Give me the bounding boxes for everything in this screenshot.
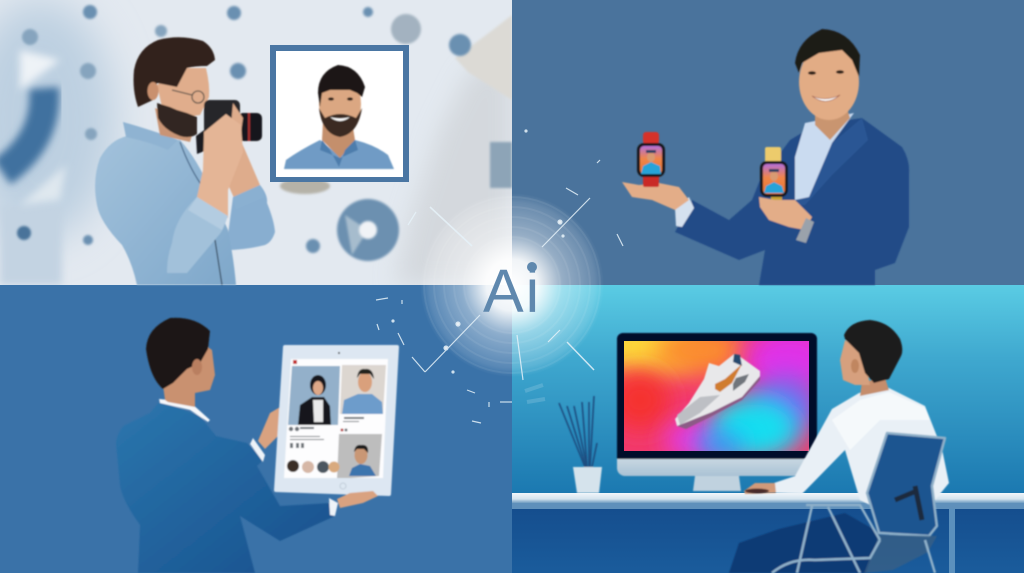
shirt body	[95, 122, 236, 285]
beard	[157, 103, 197, 137]
near hand	[197, 114, 243, 218]
panel: photographer with portrait	[0, 0, 512, 285]
watch: yellow	[760, 147, 788, 205]
plant	[559, 396, 602, 493]
collar	[159, 399, 210, 422]
portrait man	[284, 65, 394, 169]
shoe	[675, 354, 760, 429]
suit	[116, 401, 335, 573]
hair	[134, 37, 215, 107]
figure: photographer	[95, 37, 275, 285]
panel: right bottom background	[512, 285, 1024, 495]
figure: desk scene	[512, 313, 1024, 573]
cuffs	[250, 438, 265, 462]
desk	[512, 493, 1024, 573]
centre glow rings	[420, 193, 604, 377]
glasses	[172, 90, 204, 103]
panel: right top background	[512, 0, 1024, 285]
neck	[155, 108, 195, 142]
suit	[675, 118, 909, 285]
hair	[795, 29, 860, 77]
face	[157, 68, 209, 120]
seated person	[729, 320, 949, 573]
neck and ear	[163, 345, 215, 407]
monitor	[617, 333, 817, 491]
neck	[815, 108, 850, 140]
smile	[812, 95, 840, 101]
story thumbnails	[287, 460, 340, 473]
face	[840, 340, 870, 385]
lower hand	[337, 491, 378, 508]
tablet	[276, 347, 397, 494]
neck	[860, 378, 889, 396]
AI logo text: Ai	[483, 257, 541, 325]
holding hand	[759, 197, 812, 230]
raised hand	[258, 403, 290, 449]
tech lines and particles	[376, 130, 623, 423]
palm hand	[622, 182, 689, 210]
photo: man top	[340, 365, 386, 414]
feed text lines	[289, 417, 364, 448]
ear	[148, 82, 158, 100]
portrait frame	[270, 45, 409, 182]
figure: businessman with watches	[622, 29, 909, 285]
watch: red	[637, 132, 665, 187]
face	[799, 44, 859, 120]
photo: man bottom	[337, 434, 382, 479]
shirt	[774, 388, 949, 520]
trousers	[729, 513, 880, 573]
hair	[146, 318, 210, 389]
left cuff	[675, 197, 694, 227]
shirt	[795, 113, 854, 200]
wristwatch	[796, 218, 814, 243]
figure: person with tablet	[116, 318, 397, 573]
photo: woman	[288, 366, 340, 425]
monitor screen with shoe	[624, 341, 809, 451]
camera	[196, 100, 262, 154]
chair	[772, 433, 945, 573]
far arm	[226, 185, 275, 250]
far hand	[226, 103, 260, 198]
hand on mouse	[744, 483, 776, 494]
near arm sleeve	[167, 197, 227, 273]
panel: left bottom background	[0, 285, 512, 573]
hair	[844, 320, 902, 383]
